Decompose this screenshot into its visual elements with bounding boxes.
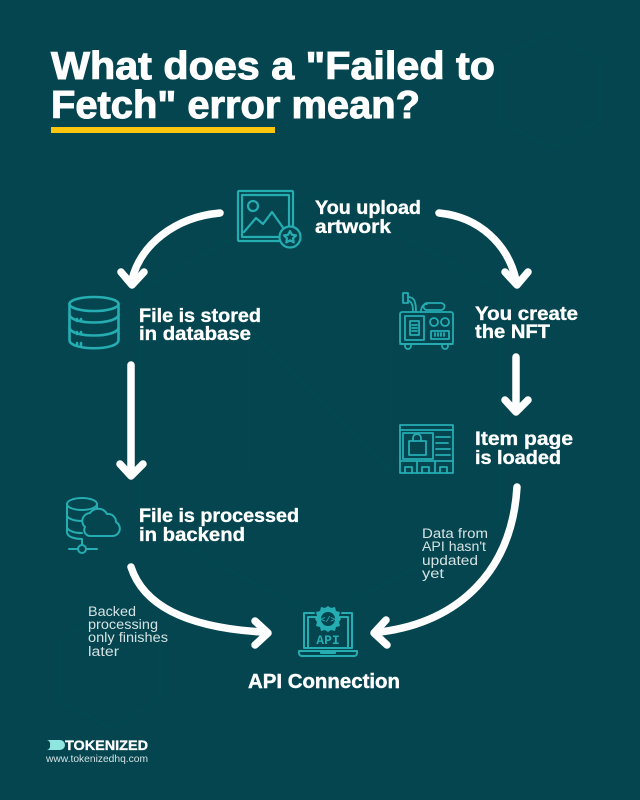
step: file is stored in database: File is stored [139,306,261,327]
arrow: upload to database [121,213,220,285]
step: you create the NFT: You create [475,304,578,325]
note: backend processing: only finishes [88,630,168,645]
title: What does a "Failed to [51,45,495,88]
icon: database [70,297,118,348]
note: API data: API hasn't [422,539,486,554]
note: API data: yet [422,566,444,581]
step: item page is loaded: is loaded [475,448,561,469]
note: backend processing: processing [88,617,158,632]
step: you create the NFT: the NFT [475,322,550,343]
arrow: upload to create NFT [439,213,528,285]
step: API connection: API Connection [248,671,400,693]
arrow: create NFT to item page [505,357,528,412]
note: API data [422,526,488,581]
icon: NFT machine [400,293,453,349]
website url: www.tokenizedhq.com [45,753,148,765]
title: Fetch" error mean? [51,84,420,127]
note: backend processing: Backed [88,604,136,619]
note: backend processing: later [88,644,120,659]
arrow: backend to API [131,567,268,645]
step: file is processed in backend: in backend [139,525,245,546]
step: file is stored in database: in database [139,324,251,345]
step: file is processed in backend [139,506,299,546]
icon: image upload [238,191,300,248]
arrow: item page to API [374,487,517,645]
logo: tokenized: TOKENIZED [65,738,148,753]
arrow: database to backend [120,365,143,476]
note: API data: updated [422,553,478,568]
step: you create the NFT [475,304,578,343]
step: you upload artwork: artwork [315,217,391,238]
step: item page is loaded: Item page [475,429,573,450]
icon: API laptop: API [316,633,340,648]
icon: API laptop: </> [321,616,335,625]
note: backend processing [88,604,168,659]
step: file is processed in backend: File is processed [139,506,299,527]
title underline [51,127,275,133]
note: API data: Data from [422,526,488,541]
step: you upload artwork [315,198,421,238]
step: file is stored in database [139,306,261,345]
step: item page is loaded [475,429,573,469]
step: you upload artwork: You upload [315,198,421,219]
icon: API laptop [299,606,357,656]
title [51,45,495,127]
icon: cloud server [67,498,120,553]
icon: item page [400,425,453,473]
